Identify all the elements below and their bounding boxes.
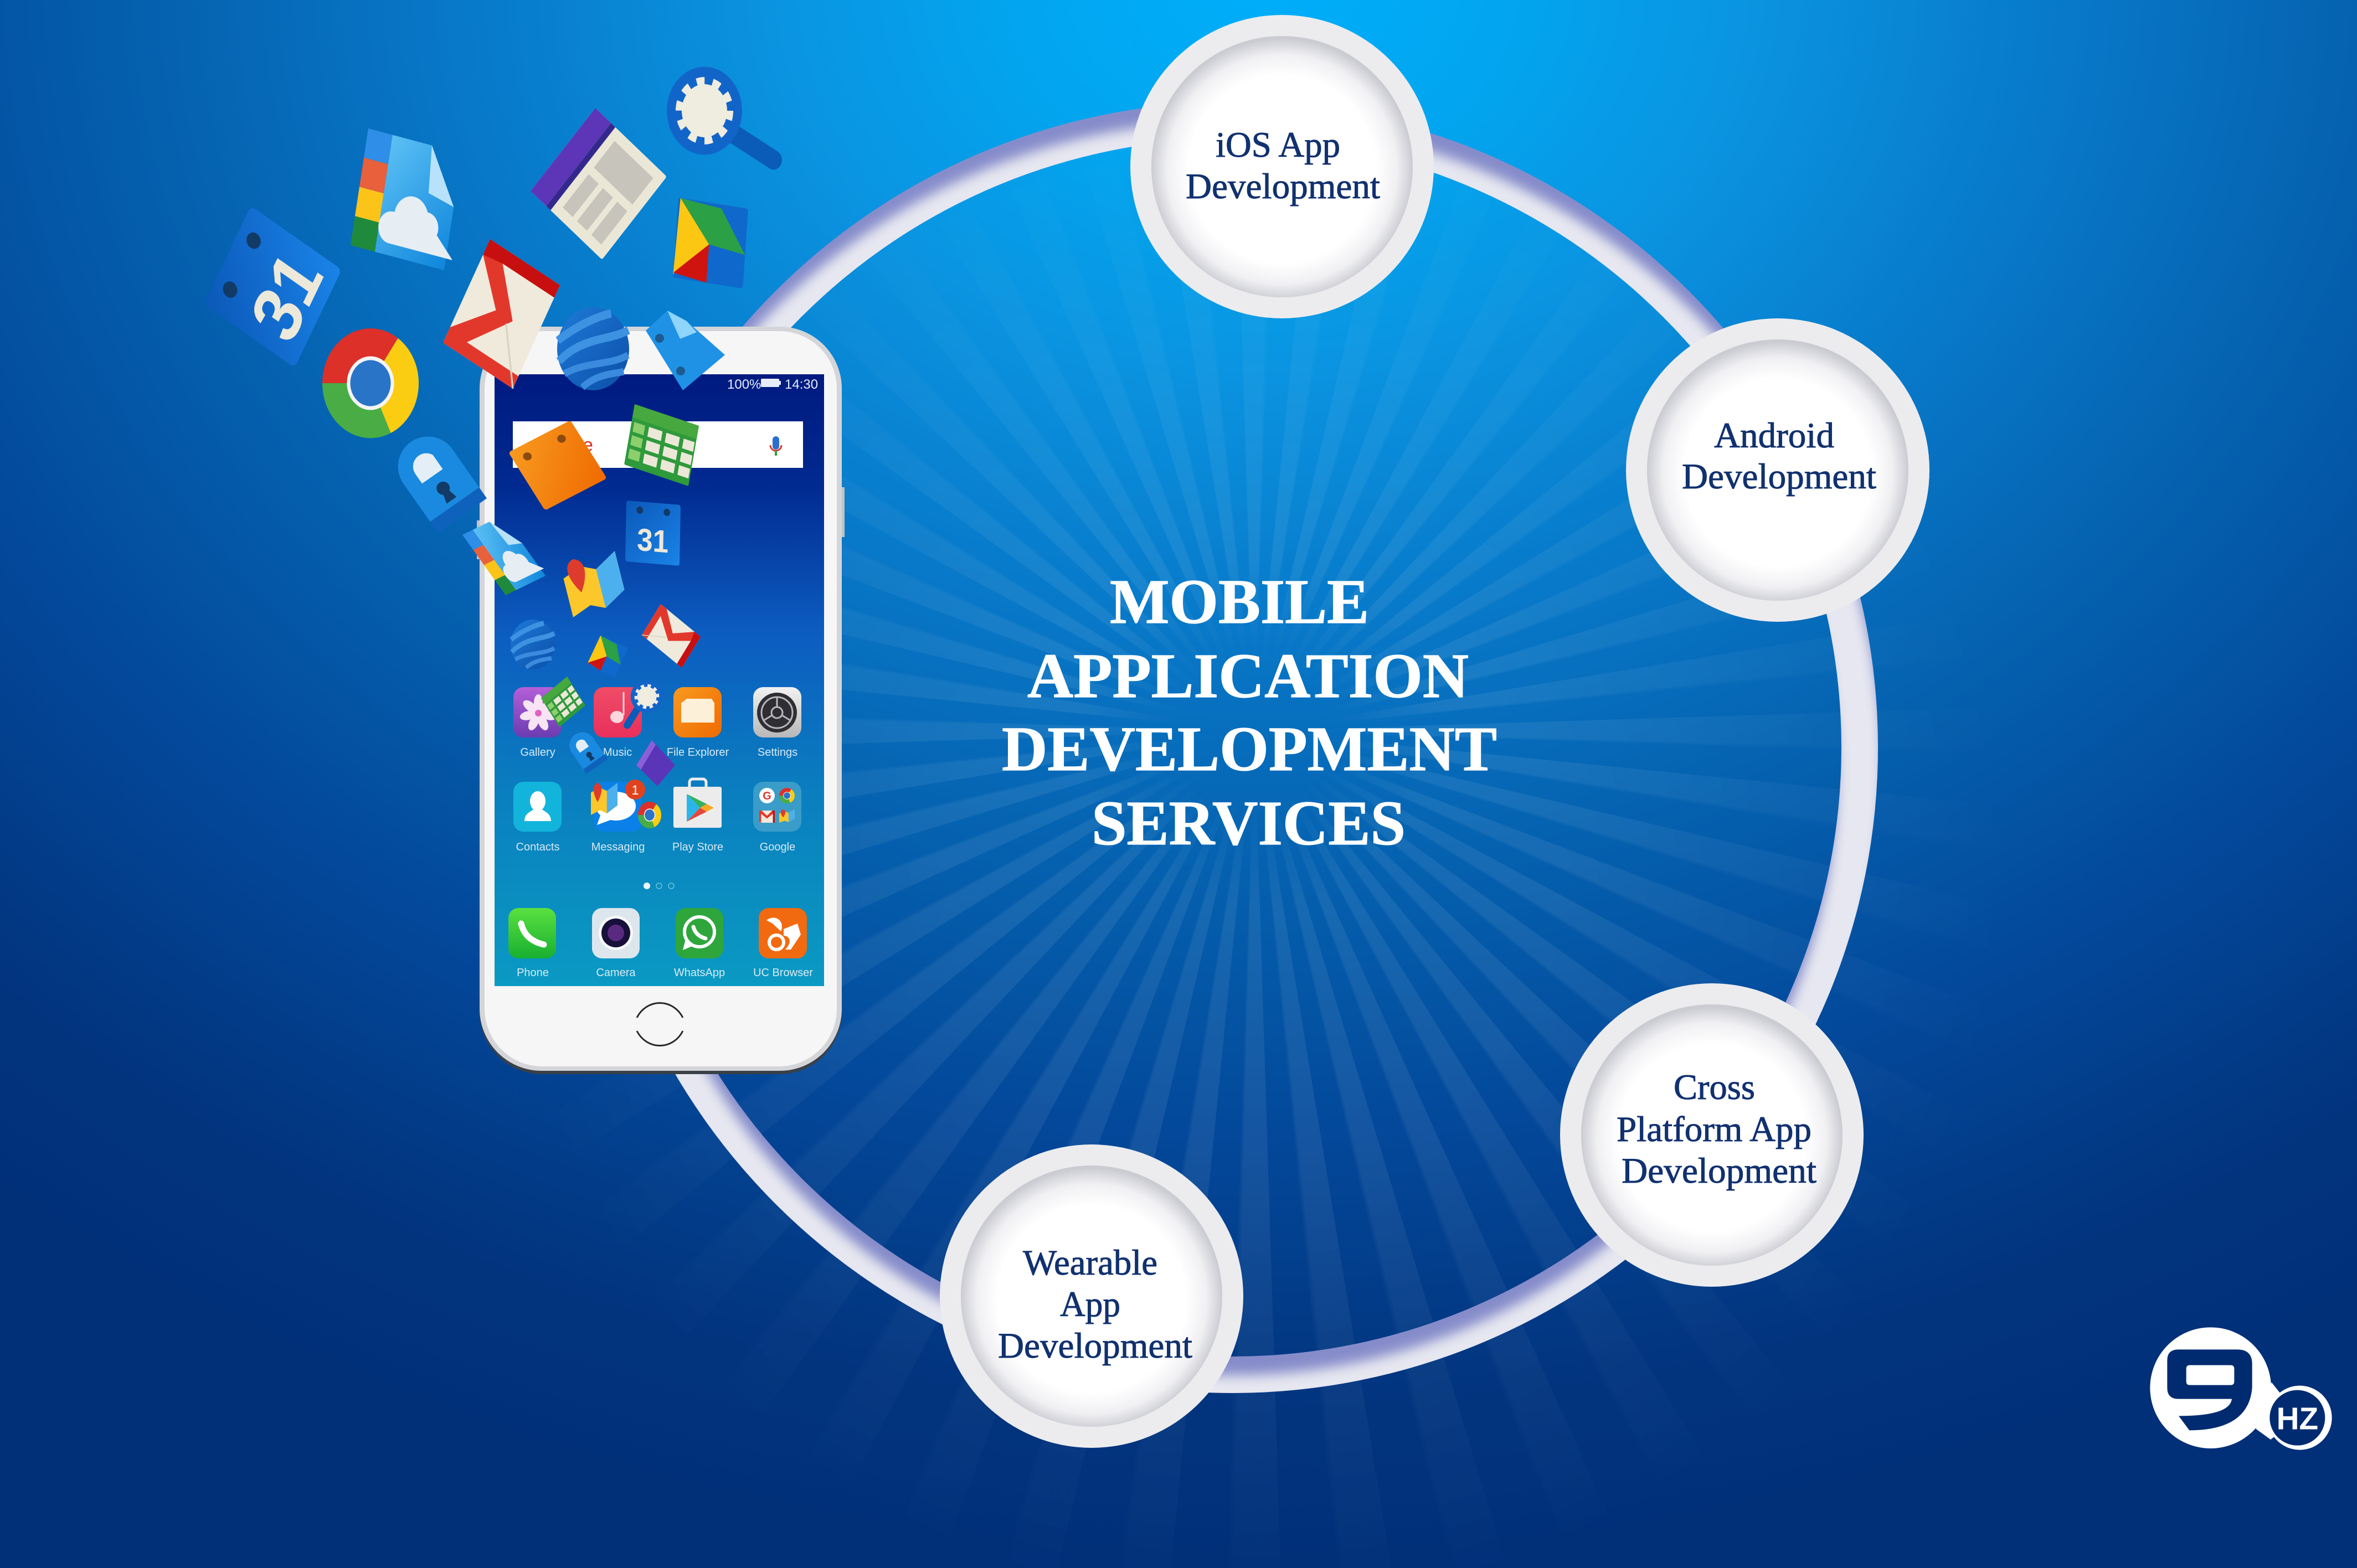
icon: small chrome bbox=[638, 802, 661, 828]
app: Google folder: Google bbox=[760, 841, 795, 853]
icon: small gmail bbox=[642, 604, 701, 668]
icon: earth bbox=[557, 307, 629, 390]
app: Play Store bbox=[672, 779, 723, 853]
notification badge: 1 bbox=[631, 783, 639, 798]
status bar: 14:30 bbox=[785, 377, 818, 392]
icon: newspaper bbox=[531, 108, 667, 260]
icon: drive triangle bbox=[673, 198, 748, 288]
icon: magnifier gear bbox=[667, 66, 774, 160]
app: Music bbox=[594, 687, 642, 759]
notification badge bbox=[625, 780, 645, 800]
app: WhatsApp bbox=[674, 908, 725, 979]
icon: blue folder bbox=[646, 311, 725, 390]
service node: Wearable: App bbox=[1060, 1285, 1120, 1324]
service node: Android bbox=[1626, 318, 1929, 622]
service node: Wearable: Wearable bbox=[1023, 1243, 1157, 1283]
app: Settings bbox=[753, 687, 801, 759]
app: Google folder: G bbox=[763, 790, 771, 802]
app: UC Browser: UC Browser bbox=[753, 967, 813, 979]
service node: iOS bbox=[1130, 15, 1434, 318]
service node: Cross Platform: Platform App bbox=[1617, 1110, 1812, 1149]
app: Contacts bbox=[513, 782, 562, 853]
icon: small calendar: 31 bbox=[637, 522, 669, 560]
icon: small earth bbox=[511, 620, 555, 669]
service node: Cross Platform bbox=[1560, 983, 1864, 1287]
app: Gallery bbox=[513, 687, 562, 759]
icon: maps bbox=[559, 551, 629, 617]
service node: Android: Android bbox=[1714, 416, 1834, 456]
icon: small lock bbox=[564, 727, 608, 774]
app: Messaging: Messaging bbox=[591, 841, 645, 853]
app: Messaging bbox=[591, 782, 645, 853]
title: APPLICATION bbox=[1027, 641, 1469, 711]
icon: small calendar bbox=[625, 501, 681, 566]
service node: Android: Development bbox=[1682, 457, 1876, 497]
status bar bbox=[727, 377, 818, 392]
phone body bbox=[477, 327, 845, 1074]
app: Phone bbox=[508, 908, 556, 979]
icon: large gmail bbox=[443, 239, 560, 389]
app: File Explorer: File Explorer bbox=[667, 746, 729, 759]
service node: Cross Platform: Cross bbox=[1674, 1067, 1755, 1107]
icon: small spreadsheet bbox=[541, 677, 585, 727]
service node: Wearable bbox=[940, 1144, 1243, 1448]
icon: large lock bbox=[387, 425, 487, 533]
app: Camera bbox=[592, 908, 640, 979]
service node: iOS: iOS App bbox=[1216, 125, 1340, 165]
app: WhatsApp: WhatsApp bbox=[674, 967, 725, 979]
page dots bbox=[644, 883, 674, 889]
icon: small maps on messaging bbox=[591, 783, 617, 815]
connecting ring bbox=[605, 120, 1860, 1398]
app: File Explorer bbox=[667, 687, 729, 759]
app: Contacts: Contacts bbox=[516, 841, 559, 853]
icon: cloud docs bbox=[351, 128, 469, 272]
service node: iOS: Development bbox=[1186, 167, 1380, 207]
home button bbox=[637, 1003, 683, 1046]
app: Music: Music bbox=[603, 746, 632, 759]
icon: small magnifier bbox=[627, 679, 664, 727]
icon: orange notebook bbox=[508, 420, 607, 510]
smartphone bbox=[477, 327, 845, 1074]
icon: purple book bbox=[636, 740, 675, 786]
app: Phone: Phone bbox=[517, 967, 549, 979]
icon: large calendar: 31 bbox=[235, 237, 337, 356]
icon: chrome bbox=[322, 328, 419, 438]
icon: large calendar bbox=[204, 206, 343, 369]
app: Settings: Settings bbox=[758, 746, 797, 759]
app: UC Browser bbox=[753, 908, 813, 979]
service node: Wearable: Development bbox=[998, 1326, 1192, 1366]
status bar: 100% bbox=[727, 377, 761, 392]
service node: Cross Platform: Development bbox=[1622, 1151, 1816, 1191]
logo: 9 HZ bbox=[2150, 1327, 2332, 1450]
title bbox=[1002, 566, 1497, 858]
app: Play Store: Play Store bbox=[672, 841, 723, 853]
icon: spreadsheet bbox=[624, 404, 699, 486]
app: Camera: Camera bbox=[596, 967, 636, 979]
search bar bbox=[513, 421, 803, 468]
title: DEVELOPMENT bbox=[1002, 714, 1497, 784]
search bar: e bbox=[583, 435, 593, 456]
icon: small cloud docs bbox=[462, 514, 548, 595]
logo: 9 HZ: HZ bbox=[2277, 1402, 2318, 1437]
icon: small drive triangle bbox=[587, 635, 628, 677]
phone screen bbox=[495, 374, 824, 986]
app: Gallery: Gallery bbox=[520, 746, 555, 759]
app: Google folder bbox=[753, 782, 801, 853]
sunburst rays bbox=[756, 316, 1803, 1412]
title: MOBILE bbox=[1110, 566, 1369, 637]
title: SERVICES bbox=[1092, 788, 1406, 858]
